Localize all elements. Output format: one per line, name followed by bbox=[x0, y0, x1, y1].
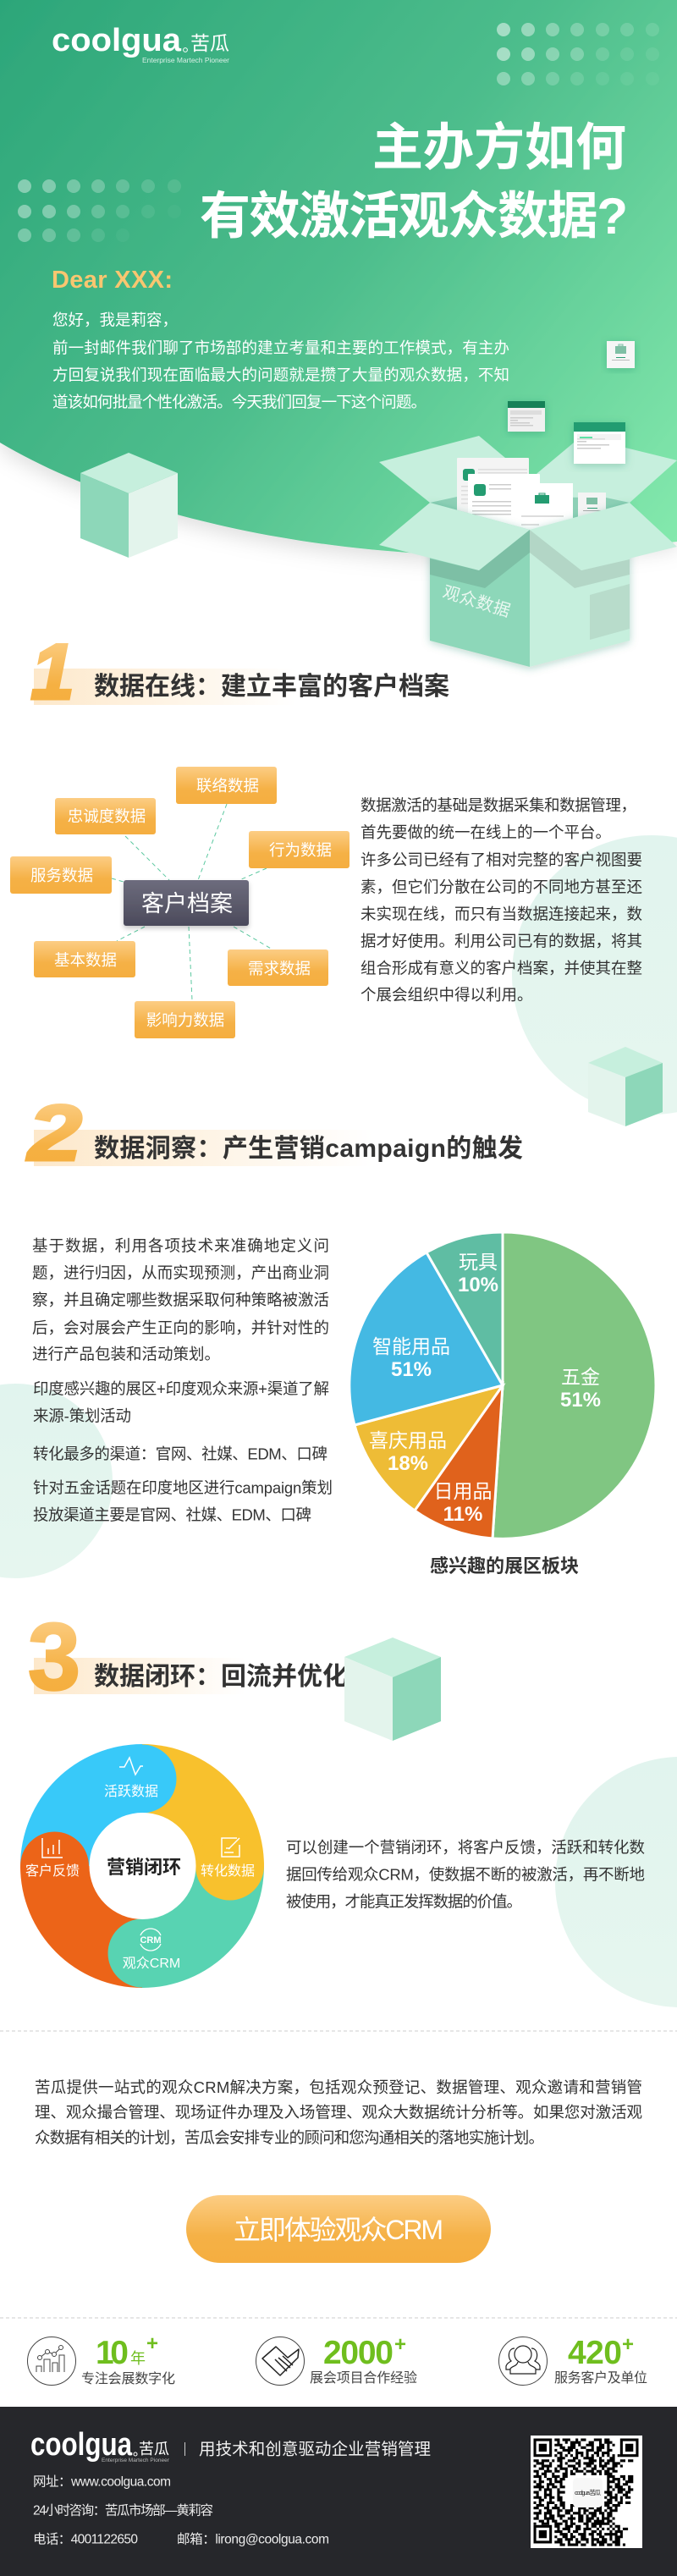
slice: 五金: 51% bbox=[560, 1389, 601, 1412]
heading band bbox=[34, 1658, 245, 1694]
slice: 日用品: 11% bbox=[443, 1503, 482, 1526]
slice: 日用品: 日用品 bbox=[433, 1480, 493, 1502]
stat: 420 clients: 420 bbox=[568, 2335, 622, 2371]
QR code: coolgua 苦瓜 bbox=[575, 2488, 601, 2496]
slice: 智能用品: 51% bbox=[391, 1358, 432, 1381]
contact: email: 邮箱：lirong@coolgua.com bbox=[177, 2532, 329, 2547]
footer background bbox=[0, 2407, 677, 2576]
heading: 数据在线：建立丰富的客户档案 bbox=[94, 673, 449, 701]
greeting: Dear XXX: bbox=[52, 267, 173, 294]
stat: 2000 projects bbox=[256, 2333, 417, 2386]
closing text: 理、观众撮合管理、现场证件办理及入场管理、观众大数据统计分析等。如果您对激活观 bbox=[35, 2104, 642, 2121]
logo: coolgua: Enterprise Martech Pioneer bbox=[142, 56, 229, 64]
intro text: 道该如何批量个性化激活。今天我们回复一下这个问题。 bbox=[52, 393, 427, 411]
heading band bbox=[34, 1130, 372, 1166]
panel: hero header bbox=[0, 0, 677, 667]
node: 忠诚度数据 bbox=[55, 798, 156, 834]
numeral 2: 2 bbox=[26, 1088, 82, 1177]
section 2 text: 印度感兴趣的展区+印度观众来源+渠道了解 bbox=[33, 1379, 329, 1398]
section 3 text bbox=[286, 1838, 645, 1911]
stat: 420 clients bbox=[499, 2333, 647, 2386]
logo: coolgua bbox=[52, 23, 229, 64]
box label: 观众数据 bbox=[441, 582, 513, 621]
node: 影响力数据 bbox=[135, 1001, 235, 1038]
cube right bbox=[588, 1047, 663, 1126]
intro text: 前一封邮件我们聊了市场部的建立考量和主要的工作模式，有主办 bbox=[52, 339, 509, 357]
illustration: open data box bbox=[379, 341, 677, 667]
section 2 text: 针对五金话题在印度地区进行campaign策划 bbox=[33, 1479, 333, 1496]
node: 行为数据: 行为数据 bbox=[269, 841, 332, 859]
section 2 text: 察，并且确定哪些数据采取何种策略被激活 bbox=[32, 1291, 329, 1308]
decorative blob left of section 2 bbox=[0, 1384, 113, 1578]
section 1 text: 据才好使用。利用公司已有的数据，将其 bbox=[361, 933, 642, 949]
button: CTA bbox=[186, 2195, 491, 2263]
heading band bbox=[34, 669, 296, 705]
intro text: 方回复说我们现在面临最大的问题就是攒了大量的观众数据，不知 bbox=[52, 366, 509, 384]
node: 基本数据 bbox=[34, 941, 135, 977]
heading: 数据闭环：回流并优化 bbox=[94, 1663, 348, 1691]
QR code bbox=[531, 2436, 642, 2548]
numeral 3: 3 bbox=[28, 1604, 80, 1709]
slice: 日用品 bbox=[415, 1385, 503, 1538]
node: 忠诚度数据: 忠诚度数据 bbox=[68, 807, 146, 825]
section 1 text: 数据激活的基础是数据采集和数据管理， bbox=[361, 796, 636, 814]
node: 影响力数据: 影响力数据 bbox=[146, 1011, 224, 1029]
node: 服务数据: 服务数据 bbox=[30, 867, 93, 884]
slice: 喜庆用品: 喜庆用品 bbox=[369, 1429, 447, 1451]
node: 联络数据: 联络数据 bbox=[196, 777, 259, 795]
segment: 观众CRM: CRM bbox=[140, 1935, 162, 1946]
segment: 客户反馈 bbox=[25, 1838, 80, 1879]
floating window card 2 bbox=[574, 422, 625, 464]
title: 有效激活观众数据? bbox=[200, 188, 628, 245]
icon: people bbox=[499, 2337, 547, 2385]
node: 基本数据: 基本数据 bbox=[54, 951, 117, 969]
contact: consult: 24小时咨询：苦瓜市场部—黄莉容 bbox=[33, 2503, 213, 2518]
back flaps bbox=[379, 436, 542, 508]
slice: 玩具: 10% bbox=[458, 1274, 498, 1296]
icon: bar chart bbox=[27, 2337, 76, 2385]
slice: 五金 bbox=[493, 1232, 656, 1538]
section 3 text: 据回传给观众CRM，使数据不断的被激活，再不断地 bbox=[286, 1865, 645, 1884]
cube left bbox=[80, 453, 178, 558]
section 2 text: 进行产品包装和活动策划。 bbox=[32, 1346, 220, 1362]
stat: 2000 projects: 2000 bbox=[323, 2335, 394, 2371]
floating card small bbox=[607, 341, 635, 368]
slice: 喜庆用品: 18% bbox=[388, 1452, 428, 1475]
cube centre bbox=[344, 1638, 441, 1741]
numeral 1: 1 bbox=[30, 627, 74, 716]
closing text: 苦瓜提供一站式的观众CRM解决方案，包括观众预登记、数据管理、观众邀请和营销管 bbox=[35, 2078, 642, 2096]
contact: website: 网址：www.coolgua.com bbox=[33, 2474, 171, 2490]
stat: 10 years bbox=[27, 2332, 175, 2386]
panel: section 1 bbox=[10, 627, 663, 1126]
pie caption: 感兴趣的展区板块 bbox=[430, 1555, 579, 1577]
decorative blob right of section 1 bbox=[512, 835, 677, 1115]
decorative blob right of section 3 bbox=[555, 1757, 677, 2007]
panel: footer bbox=[0, 2407, 677, 2576]
closing text bbox=[35, 2078, 642, 2146]
segment: 转化数据: 转化数据 bbox=[201, 1863, 255, 1879]
segment: 客户反馈: 客户反馈 bbox=[25, 1863, 80, 1879]
section 3 text: 可以创建一个营销闭环，将客户反馈，活跃和转化数 bbox=[286, 1838, 645, 1857]
section 1 text: 素，但它们分散在公司的不同地方甚至还 bbox=[361, 878, 642, 895]
section 3 text: 被使用，才能真正发挥数据的价值。 bbox=[286, 1892, 522, 1911]
slice: 喜庆用品 bbox=[355, 1385, 503, 1511]
ring centre bbox=[90, 1813, 196, 1919]
section 2 text: 转化最多的渠道：官网、社媒、EDM、口碑 bbox=[33, 1445, 327, 1462]
box body bbox=[430, 503, 630, 667]
node: 联络数据 bbox=[176, 767, 277, 804]
slice: 五金: 五金 bbox=[561, 1366, 600, 1388]
section 1 text: 个展会组织中得以利用。 bbox=[361, 986, 533, 1004]
panel: statistics bbox=[27, 2332, 647, 2386]
stat: 2000 projects: 展会项目合作经验 bbox=[310, 2370, 417, 2386]
section 1 text: 首先要做的统一在线上的一个平台。 bbox=[361, 823, 611, 841]
logo: coolgua: 苦瓜 bbox=[190, 32, 229, 54]
heading: 数据洞察：产生营销campaign的触发 bbox=[94, 1135, 523, 1163]
pie chart bbox=[350, 1232, 656, 1538]
section 2 text bbox=[32, 1237, 333, 1523]
section 1 text: 许多公司已经有了相对完整的客户视图要 bbox=[361, 851, 642, 868]
segment: 观众CRM: 观众CRM bbox=[123, 1956, 180, 1971]
floating window card 1 bbox=[508, 401, 545, 432]
node: 客户档案: 客户档案 bbox=[141, 891, 233, 916]
ring diagram: marketing loop bbox=[20, 1744, 264, 1988]
front flaps bbox=[379, 503, 530, 570]
node: 客户档案 bbox=[124, 880, 249, 926]
ring centre label: 营销闭环 bbox=[107, 1857, 181, 1878]
decorative dots top right bbox=[497, 23, 659, 85]
section 2 text: 基于数据，利用各项技术来准确地定义问 bbox=[32, 1237, 329, 1254]
stat: 10 years: 年 bbox=[130, 2350, 146, 2367]
intro text: 您好，我是莉容， bbox=[52, 311, 178, 328]
box shadow bands bbox=[430, 530, 530, 588]
stat: 10 years: 10 bbox=[96, 2335, 129, 2371]
document D bbox=[578, 493, 606, 521]
intro text bbox=[52, 311, 509, 411]
button: CTA: 立即体验观众CRM bbox=[234, 2215, 443, 2245]
footer logo: coolgua bbox=[30, 2427, 133, 2463]
closing text: 众数据有相关的计划，苦瓜会安排专业的顾问和您沟通相关的落地实施计划。 bbox=[35, 2129, 544, 2146]
section 2 text: 后，会对展会产生正向的影响，并针对性的 bbox=[32, 1318, 329, 1337]
section 1 text: 组合形成有意义的客户档案，并使其在整 bbox=[361, 960, 642, 977]
icon: handshake bbox=[256, 2337, 305, 2385]
panel: section 3 bbox=[20, 1604, 645, 1988]
node: 服务数据 bbox=[10, 856, 112, 894]
section 2 text: 投放渠道主要是官网、社媒、EDM、口碑 bbox=[33, 1506, 311, 1523]
footer divider bbox=[184, 2442, 185, 2456]
ring segments bbox=[142, 1744, 264, 1866]
diagram: customer profile bbox=[10, 767, 350, 1038]
slice: 智能用品 bbox=[350, 1252, 503, 1425]
connector lines bbox=[112, 804, 272, 1000]
stat: 10 years: + bbox=[146, 2332, 158, 2355]
slice: 玩具: 玩具 bbox=[459, 1251, 498, 1273]
contact: phone: 电话：4001122650 bbox=[33, 2532, 138, 2547]
section 1 text bbox=[361, 796, 642, 1004]
title bbox=[200, 119, 628, 245]
node: 需求数据: 需求数据 bbox=[248, 960, 311, 977]
segment: 观众CRM bbox=[123, 1929, 180, 1971]
segment: 活跃数据: 活跃数据 bbox=[104, 1784, 158, 1799]
stat: 420 clients: 服务客户及单位 bbox=[554, 2370, 647, 2386]
slice: 玩具 bbox=[427, 1232, 503, 1385]
document A bbox=[457, 458, 529, 517]
green wave background bbox=[0, 0, 677, 555]
footer logo: Enterprise Martech Pioneer bbox=[102, 2458, 170, 2463]
document C bbox=[511, 483, 573, 532]
segment: 转化数据 bbox=[201, 1838, 255, 1879]
section 2 text: 来源-策划活动 bbox=[33, 1406, 131, 1425]
tagline: 用技术和创意驱动企业营销管理 bbox=[199, 2441, 431, 2459]
slice: 智能用品: 智能用品 bbox=[372, 1335, 450, 1357]
panel: section 2 bbox=[26, 1088, 656, 1577]
title: 主办方如何 bbox=[372, 119, 626, 176]
stat: 10 years: 专注会展数字化 bbox=[81, 2371, 175, 2386]
footer logo: 苦瓜 bbox=[139, 2441, 169, 2458]
stat: 420 clients: + bbox=[622, 2333, 634, 2356]
segment: 活跃数据 bbox=[104, 1758, 158, 1799]
logo: coolgua: coolgua bbox=[52, 23, 182, 58]
stat: 2000 projects: + bbox=[394, 2333, 406, 2356]
box inner bbox=[430, 497, 630, 530]
decorative dots left bbox=[18, 179, 181, 242]
node: 需求数据 bbox=[228, 949, 328, 986]
section 1 text: 未实现在线，而只有当数据连接起来，数 bbox=[361, 905, 642, 922]
node: 行为数据 bbox=[249, 831, 350, 868]
section 2 text: 题，进行归因，从而实现预测，产出商业洞 bbox=[32, 1264, 329, 1281]
document B bbox=[468, 474, 540, 530]
